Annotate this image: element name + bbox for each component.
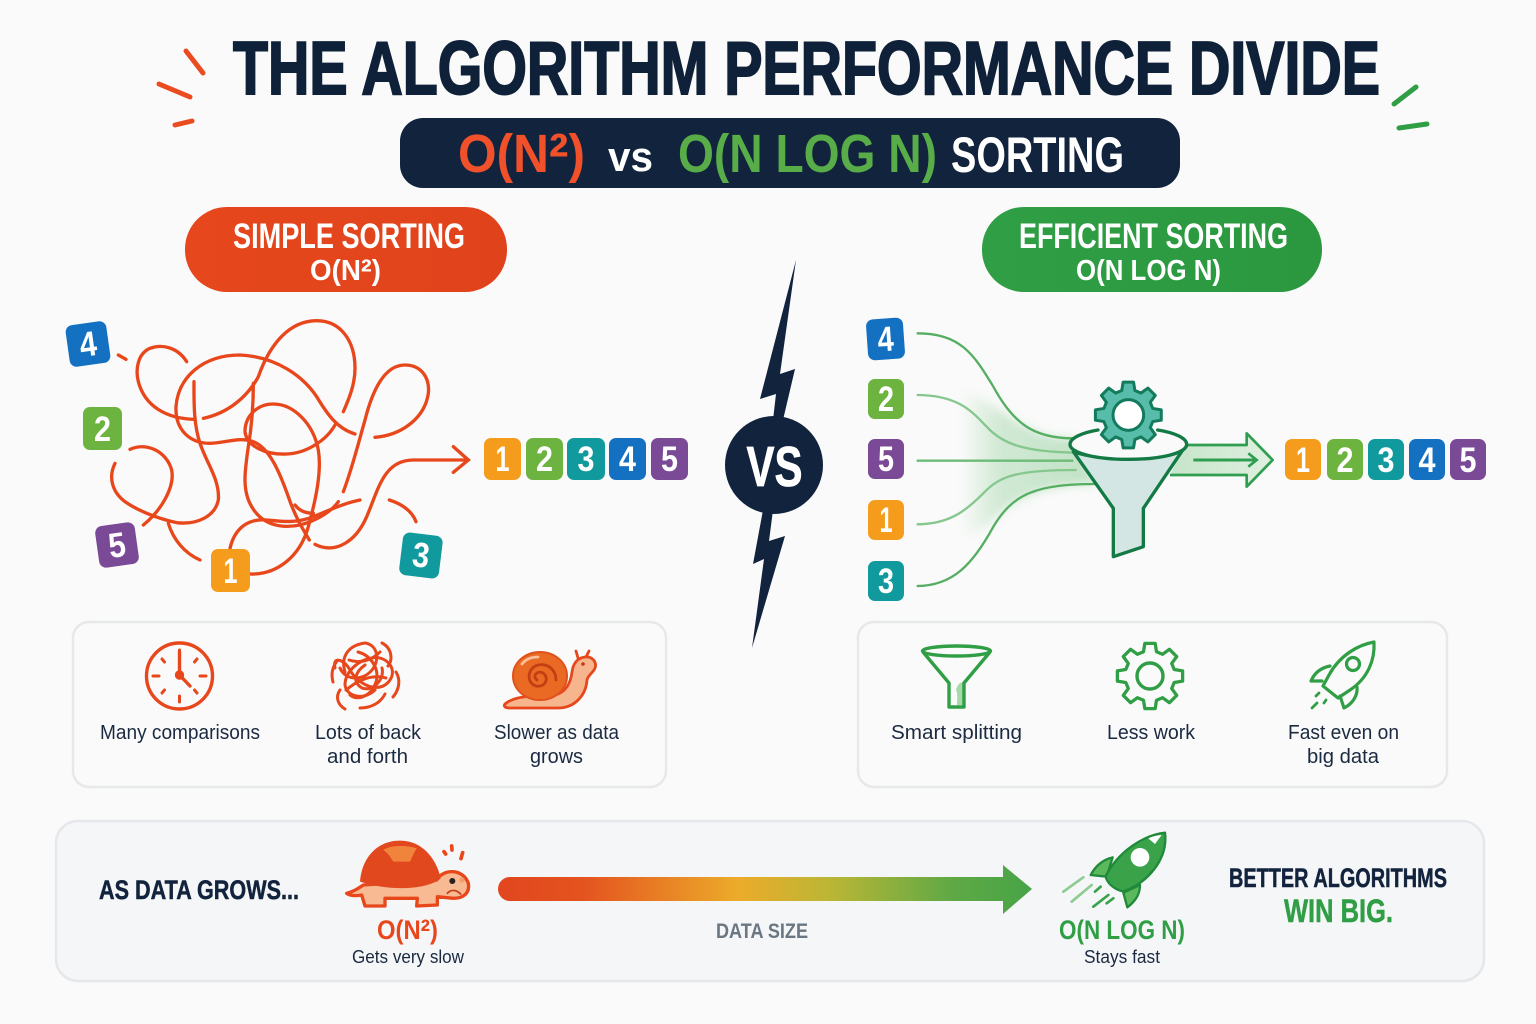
unsorted tile 2 (83, 407, 122, 450)
label: slower as data grows: Slower as data (494, 722, 620, 744)
subtitle banner: ) (568, 124, 585, 184)
label: fast complexity (1059, 915, 1185, 967)
sorted row: left: 1 (496, 440, 510, 479)
heading pill: simple sorting: O(N (310, 255, 363, 287)
label: slower as data grows (494, 722, 620, 768)
takeaway: BETTER ALGORITHMS (1229, 863, 1447, 893)
input tiles column (866, 317, 905, 601)
takeaway: WIN BIG. (1284, 893, 1393, 929)
accent strokes: left orange (159, 51, 203, 125)
icon: snail (504, 651, 596, 708)
heading pill: simple sorting: ² (361, 253, 372, 291)
takeaway (1229, 863, 1447, 929)
icon: gear (1117, 643, 1183, 709)
label: slow complexity: ) (430, 915, 438, 945)
input tiles column: 3 (878, 562, 894, 601)
sorted row: right: 2 (1336, 441, 1354, 480)
heading pill: efficient sorting (982, 207, 1322, 292)
label: fast complexity: Stays fast (1084, 947, 1160, 967)
sorted row: left (484, 438, 688, 480)
icon: scribble (332, 643, 399, 709)
unsorted tile 2: 2 (94, 410, 111, 449)
label: many comparisons: Many comparisons (100, 722, 260, 744)
label: slow complexity (352, 913, 465, 967)
icon: clock (146, 643, 212, 709)
input tiles column: 4 (876, 319, 895, 359)
unsorted tile 4 (65, 320, 111, 368)
subtitle banner: SORTING (951, 127, 1124, 183)
unsorted tile 1 (211, 549, 250, 592)
label: slow complexity: ² (421, 913, 430, 949)
unsorted tile 3: 3 (410, 535, 432, 576)
sorted row: right: 3 (1378, 441, 1394, 480)
heading pill: simple sorting: SIMPLE SORTING (233, 217, 465, 256)
input tiles column: 5 (878, 440, 894, 479)
input tiles column: 2 (878, 380, 894, 419)
subtitle banner: O(N LOG N) (678, 124, 937, 184)
panel: as data grows (56, 821, 1484, 981)
label: lots of back and forth: and forth (327, 746, 408, 768)
sorted row: left: 4 (619, 440, 636, 479)
subtitle banner: vs (608, 133, 653, 180)
VS lightning badge (725, 260, 823, 648)
sorted row: left: 3 (578, 440, 594, 479)
label: fast even on big data: big data (1307, 746, 1380, 768)
icon: funnel (922, 646, 990, 707)
label: lots of back and forth: Lots of back (315, 722, 422, 744)
sorted row: left: 2 (536, 440, 553, 479)
sorted row: right: 5 (1460, 441, 1476, 480)
icon: turtle (347, 841, 469, 906)
label: lots of back and forth (315, 722, 422, 768)
heading pill: efficient sorting: O(N LOG N) (1076, 255, 1221, 287)
icon: rocket outline (1311, 642, 1374, 708)
sorted row: right (1285, 439, 1486, 480)
unsorted tile 5 (94, 521, 140, 569)
icon: rocket (1063, 833, 1165, 907)
subtitle banner: ² (549, 120, 568, 192)
label: slower as data grows: grows (530, 746, 583, 768)
label: less work: Less work (1107, 722, 1196, 744)
unsorted tile 3 (398, 532, 443, 579)
label: data size: DATA SIZE (716, 920, 808, 943)
heading pill: simple sorting: ) (372, 255, 381, 287)
label: fast even on big data (1288, 722, 1399, 768)
input tiles column: 1 (880, 501, 892, 540)
heading pill: efficient sorting: EFFICIENT SORTING (1019, 217, 1288, 256)
label: fast even on big data: Fast even on (1288, 722, 1399, 744)
label: fast complexity: O(N LOG N) (1059, 915, 1185, 945)
output arrow (1170, 433, 1273, 487)
funnel with gear (1070, 382, 1187, 557)
unsorted tile 4: 4 (77, 324, 100, 365)
tangled path diagram (112, 321, 468, 574)
VS lightning badge: VS (746, 435, 802, 499)
accent strokes: right green (1394, 87, 1427, 128)
subtitle banner: O(N (458, 124, 557, 184)
label: as data grows: AS DATA GROWS... (99, 875, 299, 905)
label: smart splitting: Smart splitting (891, 722, 1022, 744)
sorted row: left: 5 (661, 440, 678, 479)
subtitle banner (400, 118, 1180, 192)
funnel flow lines (917, 333, 1097, 586)
panel: simple sorting traits (73, 622, 666, 787)
unsorted tile 5: 5 (106, 525, 128, 566)
panel: efficient sorting traits (858, 622, 1447, 787)
sorted row: right: 1 (1296, 441, 1310, 480)
label: slow complexity: Gets very slow (352, 947, 465, 967)
sorted row: right: 4 (1418, 441, 1436, 480)
label: slow complexity: O(N (377, 915, 426, 945)
heading pill: simple sorting (185, 207, 507, 292)
unsorted tile 1: 1 (224, 552, 238, 591)
arrow: data size gradient (498, 865, 1032, 914)
